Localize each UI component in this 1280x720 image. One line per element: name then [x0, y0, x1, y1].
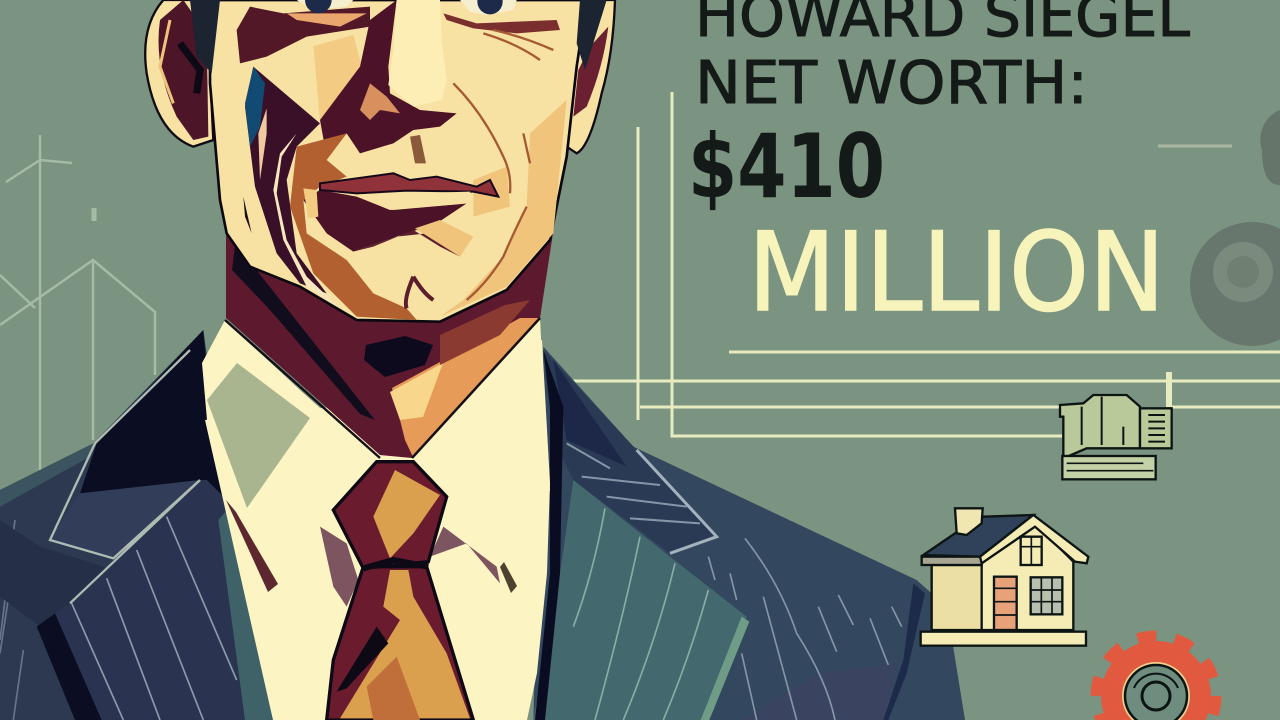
right background: line frames [572, 92, 1280, 436]
icon: cash register [1060, 395, 1172, 479]
left shoulder and jacket [0, 330, 277, 720]
icon: house [921, 508, 1088, 646]
nose side shadow [320, 0, 457, 157]
left cheek shadow [245, 67, 327, 293]
left cheek highlight [263, 35, 362, 122]
eyes [297, 0, 517, 15]
hair [190, 0, 607, 73]
right shoulder and jacket [533, 347, 965, 720]
shirt front [205, 340, 550, 720]
title [688, 0, 1190, 336]
facial creases [453, 30, 553, 300]
collar shadow [207, 363, 310, 508]
necktie [320, 462, 500, 720]
neck [226, 220, 555, 458]
icon: orange gear [1090, 630, 1222, 720]
background gears [1190, 110, 1280, 346]
right shirt collar [412, 318, 550, 593]
left background: wind turbine and building outlines [0, 135, 155, 470]
million: MILLION [748, 209, 1165, 336]
face [190, 0, 607, 322]
title: NET WORTH: [695, 48, 1088, 117]
left shirt collar [202, 320, 378, 592]
neck highlights [232, 245, 540, 457]
eye sockets [237, 7, 370, 63]
cheek white streaks [273, 133, 340, 308]
right cheek shading [440, 100, 567, 317]
chin shading [353, 230, 460, 257]
mouth [320, 173, 498, 197]
lower face shadow [290, 133, 417, 320]
amount: $410 [688, 115, 885, 218]
left ear [145, 0, 213, 147]
portrait: businessman [0, 0, 965, 720]
right ear [567, 0, 615, 153]
nose highlight [388, 0, 447, 107]
